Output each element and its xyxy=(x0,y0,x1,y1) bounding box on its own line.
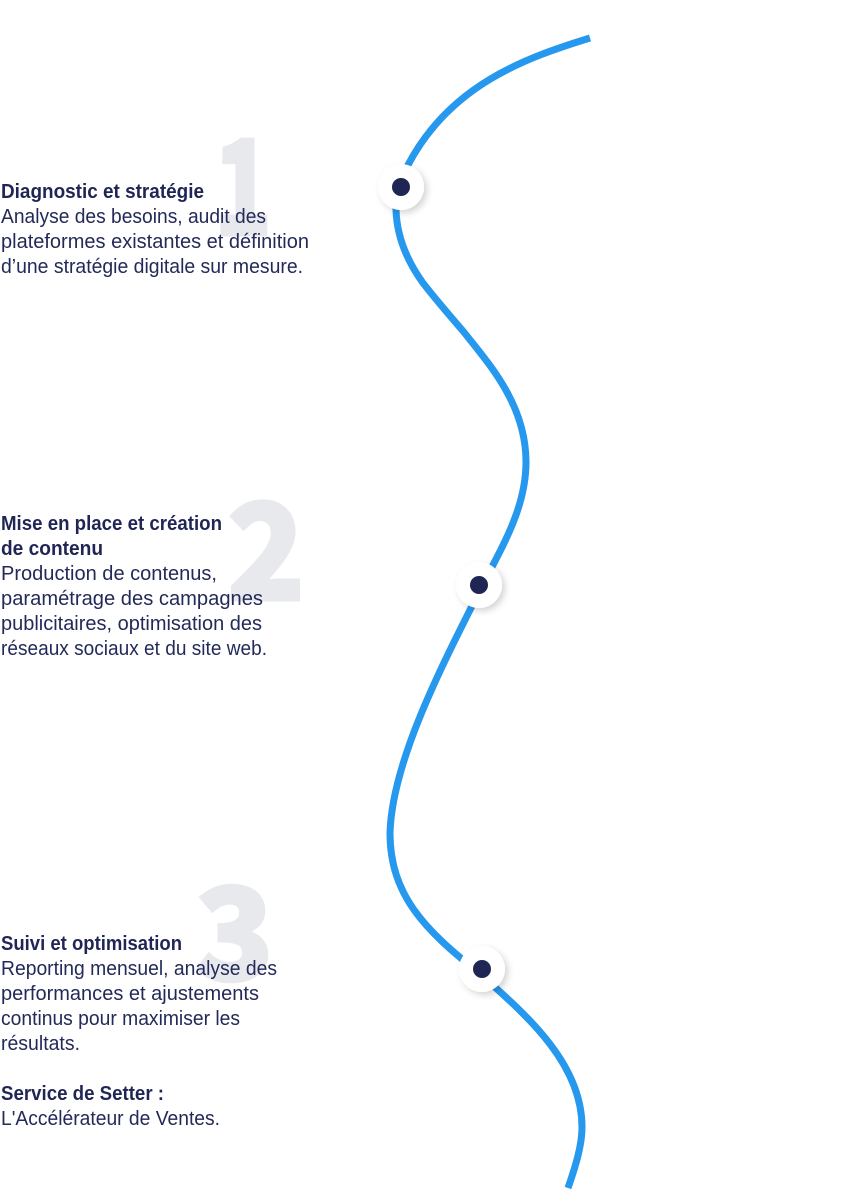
node 3 xyxy=(459,946,505,992)
number 2: 2 xyxy=(227,445,305,639)
step 2 description: publicitaires, optimisation des xyxy=(1,613,262,635)
step 1 description xyxy=(1,206,309,278)
step 2 description: paramétrage des campagnes xyxy=(1,588,263,610)
number 1: 1 xyxy=(214,83,272,274)
step 2 description: Production de contenus, xyxy=(1,563,217,585)
step 3 description: continus pour maximiser les xyxy=(1,1008,240,1030)
step 1 description: Analyse des besoins, audit des xyxy=(1,206,266,228)
step 2 heading: de contenu xyxy=(1,538,103,560)
step 2 xyxy=(1,445,305,660)
step 3 heading: Suivi et optimisation xyxy=(1,933,182,955)
step 3 description xyxy=(1,958,277,1055)
step 1 description: d’une stratégie digitale sur mesure. xyxy=(1,256,303,278)
step 2 heading: Mise en place et création xyxy=(1,513,222,535)
node 2 xyxy=(456,562,502,608)
service heading: Service de Setter : xyxy=(1,1083,164,1105)
step 3 description: performances et ajustements xyxy=(1,983,259,1005)
step 2 description: réseaux sociaux et du site web. xyxy=(1,638,267,660)
number 3: 3 xyxy=(195,832,274,1017)
step 2 heading xyxy=(1,513,222,560)
step 3 description: résultats. xyxy=(1,1033,80,1055)
step 2 description xyxy=(1,563,267,660)
timeline curve xyxy=(390,38,590,1188)
step 1 description: plateformes existantes et définition xyxy=(1,231,309,253)
step 1 heading: Diagnostic et stratégie xyxy=(1,181,204,203)
step 3 xyxy=(1,832,277,1130)
service description: L'Accélérateur de Ventes. xyxy=(1,1108,220,1130)
step 1 xyxy=(1,83,309,278)
node 1 xyxy=(378,164,424,210)
step 3 description: Reporting mensuel, analyse des xyxy=(1,958,277,980)
